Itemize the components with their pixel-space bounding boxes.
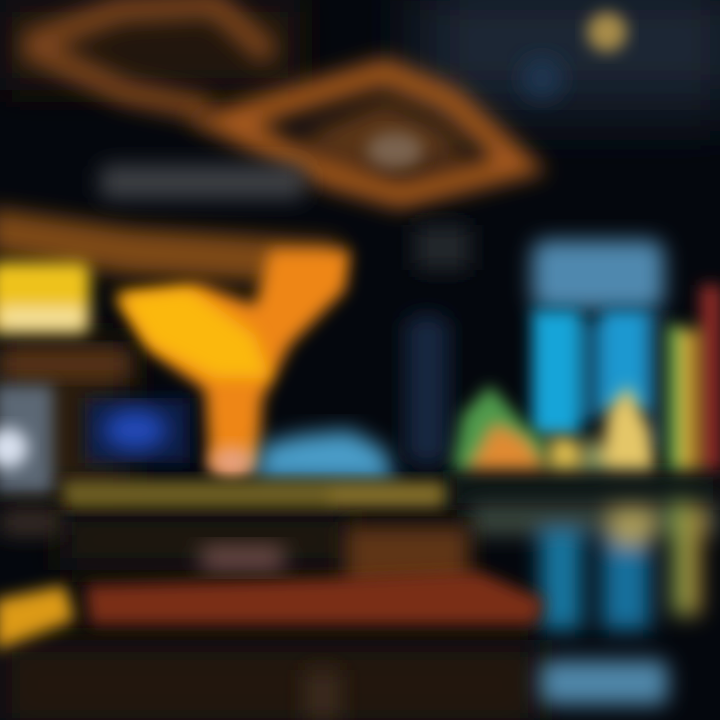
reflection of chart <box>470 500 720 705</box>
orange beam <box>0 208 340 285</box>
bar chart top cap <box>532 240 664 310</box>
cyan bars <box>532 310 662 450</box>
funnel chart <box>115 250 350 478</box>
floor reflections <box>0 510 340 720</box>
yellow lower left panel <box>0 585 75 650</box>
grey title smear <box>100 165 470 270</box>
lower wood band <box>0 350 130 378</box>
upper left wooden diamond frame <box>25 5 270 110</box>
blue wave <box>255 430 395 482</box>
yellow text band <box>62 480 447 508</box>
bar chart <box>452 240 720 470</box>
central wooden diamond frame <box>222 72 520 195</box>
moon glow <box>520 12 627 100</box>
wooden podium <box>85 525 545 625</box>
left screens <box>0 385 190 493</box>
area chart <box>452 385 655 470</box>
frame hub <box>367 132 423 168</box>
pink text smear <box>200 545 285 571</box>
yellow panel left <box>0 262 90 334</box>
dark blue column <box>405 315 449 465</box>
colored vertical bars <box>667 285 720 470</box>
